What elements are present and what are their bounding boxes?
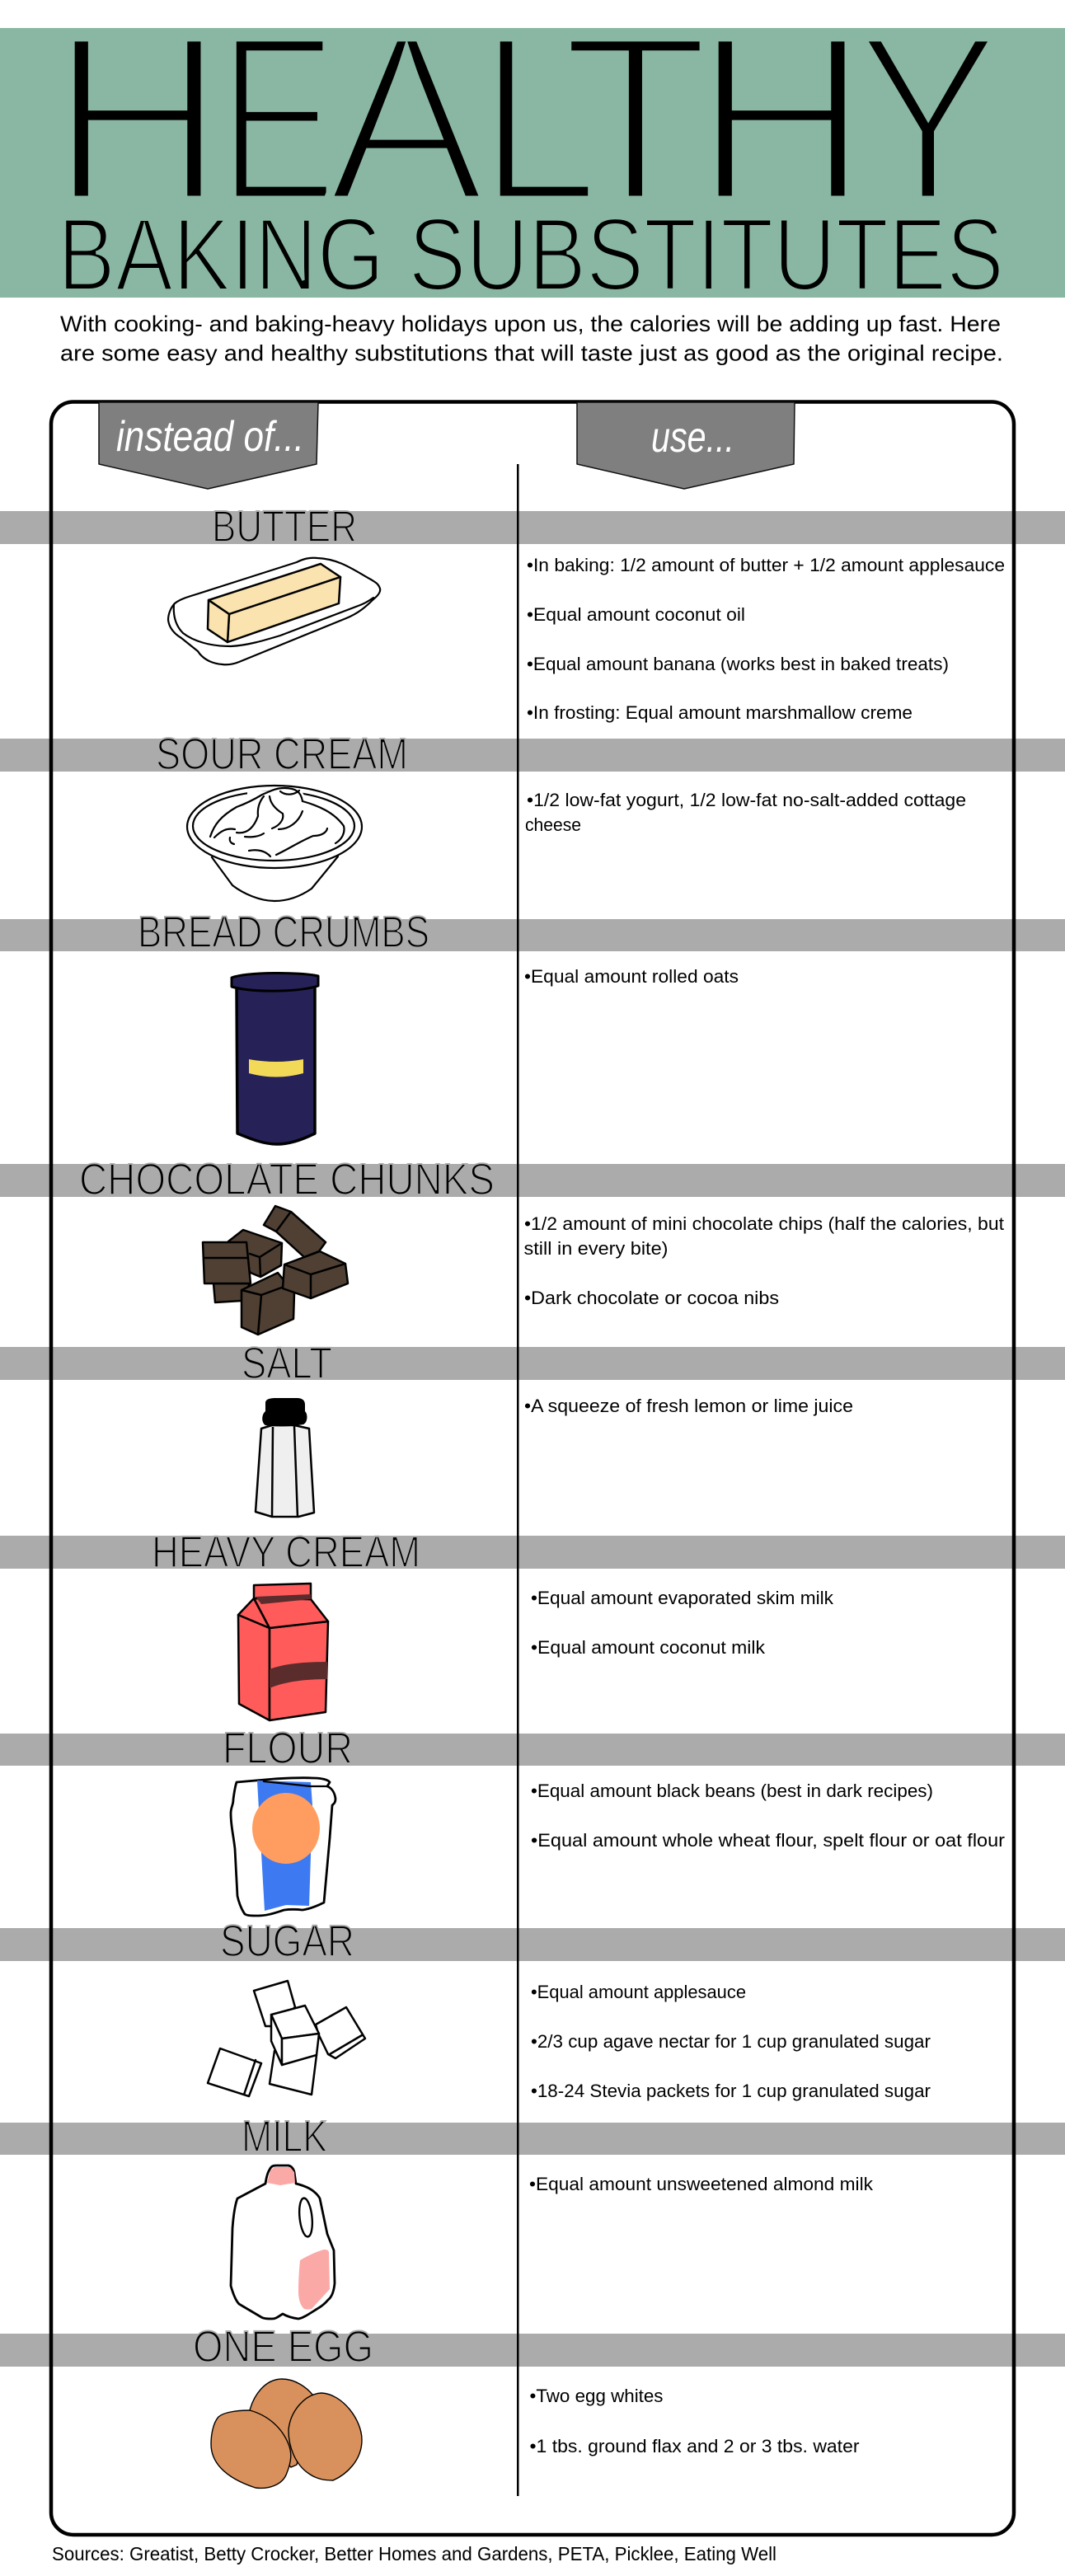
icon: butter on dish [168, 558, 380, 664]
intro text: With cooking- and baking-heavy holidays upon us, the calories will be adding up fast. Here [60, 312, 1001, 336]
substitutes: butter: •In frosting: Equal amount marshmallow creme [527, 702, 913, 723]
icon: flour bag [231, 1778, 335, 1916]
substitutes: milk: •Equal amount unsweetened almond milk [529, 2174, 874, 2194]
row: bread crumbs [0, 908, 1065, 1144]
substitutes: butter [527, 555, 1005, 723]
sources: Sources: Greatist, Betty Crocker, Better Homes and Gardens, PETA, Picklee, Eating Well [52, 2543, 776, 2564]
icon: salt shaker [256, 1398, 314, 1517]
substitutes: butter: •Equal amount banana (works best in baked treats) [527, 654, 949, 674]
substitutes: heavy cream: •Equal amount coconut milk [531, 1637, 766, 1658]
row: sour cream [0, 730, 1065, 901]
heading: bread crumbs: BREAD CRUMBS [138, 908, 429, 957]
heading: one egg: ONE EGG [193, 2322, 373, 2372]
substitutes: one egg: •Two egg whites [529, 2386, 663, 2406]
heading: chocolate chunks: CHOCOLATE CHUNKS [79, 1155, 495, 1204]
icon: bread crumbs canister [232, 973, 318, 1144]
substitutes: chocolate chunks: •1/2 amount of mini chocolate chips (half the calories, but [524, 1213, 1004, 1234]
substitutes: sugar: •2/3 cup agave nectar for 1 cup granulated sugar [531, 2031, 931, 2052]
icon: milk jug [231, 2165, 335, 2319]
substitutes: sugar [531, 1982, 931, 2101]
row: one egg [0, 2322, 1065, 2488]
substitutes: one egg [529, 2386, 859, 2456]
heading: sour cream: SOUR CREAM [156, 730, 408, 779]
icon: sugar cubes [208, 1981, 365, 2096]
icon: cream carton [238, 1584, 328, 1720]
heading: sugar: SUGAR [220, 1917, 354, 1966]
heading: milk: MILK [242, 2112, 327, 2161]
row: salt [0, 1339, 1065, 1517]
icon: eggs [211, 2379, 362, 2488]
substitutes: flour [531, 1781, 1005, 1851]
substitutes: sour cream: •1/2 low-fat yogurt, 1/2 low-fat no-salt-added cottage [527, 790, 966, 810]
heading: heavy cream: HEAVY CREAM [152, 1527, 420, 1577]
substitutes: salt: •A squeeze of fresh lemon or lime juice [524, 1396, 853, 1416]
column divider [517, 464, 519, 2496]
row: milk [0, 2112, 1065, 2319]
intro text: are some easy and healthy substitutions that will taste just as good as the original recipe. [60, 341, 1003, 366]
substitutes: sugar: •Equal amount applesauce [531, 1982, 746, 2002]
row: heavy cream [0, 1527, 1065, 1720]
icon: chocolate chunks [203, 1206, 348, 1335]
tab: instead of [99, 402, 318, 489]
heading: butter: BUTTER [212, 502, 357, 551]
header banner [0, 0, 1065, 312]
substitutes: sour cream [525, 790, 966, 835]
row: butter [0, 502, 1065, 723]
substitutes: bread crumbs: •Equal amount rolled oats [524, 966, 739, 987]
substitutes: flour: •Equal amount whole wheat flour, spelt flour or oat flour [531, 1830, 1005, 1851]
heading: flour: FLOUR [223, 1724, 353, 1773]
intro text [60, 312, 1003, 366]
substitutes: heavy cream [531, 1588, 834, 1658]
substitutes: sour cream: cheese [525, 814, 581, 835]
row: chocolate chunks [0, 1155, 1065, 1335]
heading: salt: SALT [242, 1339, 332, 1388]
substitutes: sugar: •18-24 Stevia packets for 1 cup granulated sugar [531, 2081, 931, 2101]
table frame [51, 402, 1014, 2535]
substitutes: one egg: •1 tbs. ground flax and 2 or 3 tbs. water [529, 2436, 859, 2456]
substitutes: chocolate chunks: •Dark chocolate or cocoa nibs [524, 1288, 779, 1308]
substitutes: butter: •In baking: 1/2 amount of butter + 1/2 amount applesauce [527, 555, 1005, 575]
tab: instead of: instead of... [116, 413, 304, 461]
tab: use: use... [651, 414, 734, 462]
tab: use [577, 402, 795, 489]
icon: bowl of sour cream [187, 786, 362, 901]
substitutes: chocolate chunks: still in every bite) [524, 1238, 668, 1259]
row: sugar [0, 1917, 1065, 2101]
row: flour [0, 1724, 1065, 1916]
substitutes: butter: •Equal amount coconut oil [527, 604, 745, 625]
substitutes: flour: •Equal amount black beans (best in dark recipes) [531, 1781, 933, 1801]
substitutes: chocolate chunks [524, 1213, 1004, 1308]
substitutes: heavy cream: •Equal amount evaporated skim milk [531, 1588, 834, 1608]
